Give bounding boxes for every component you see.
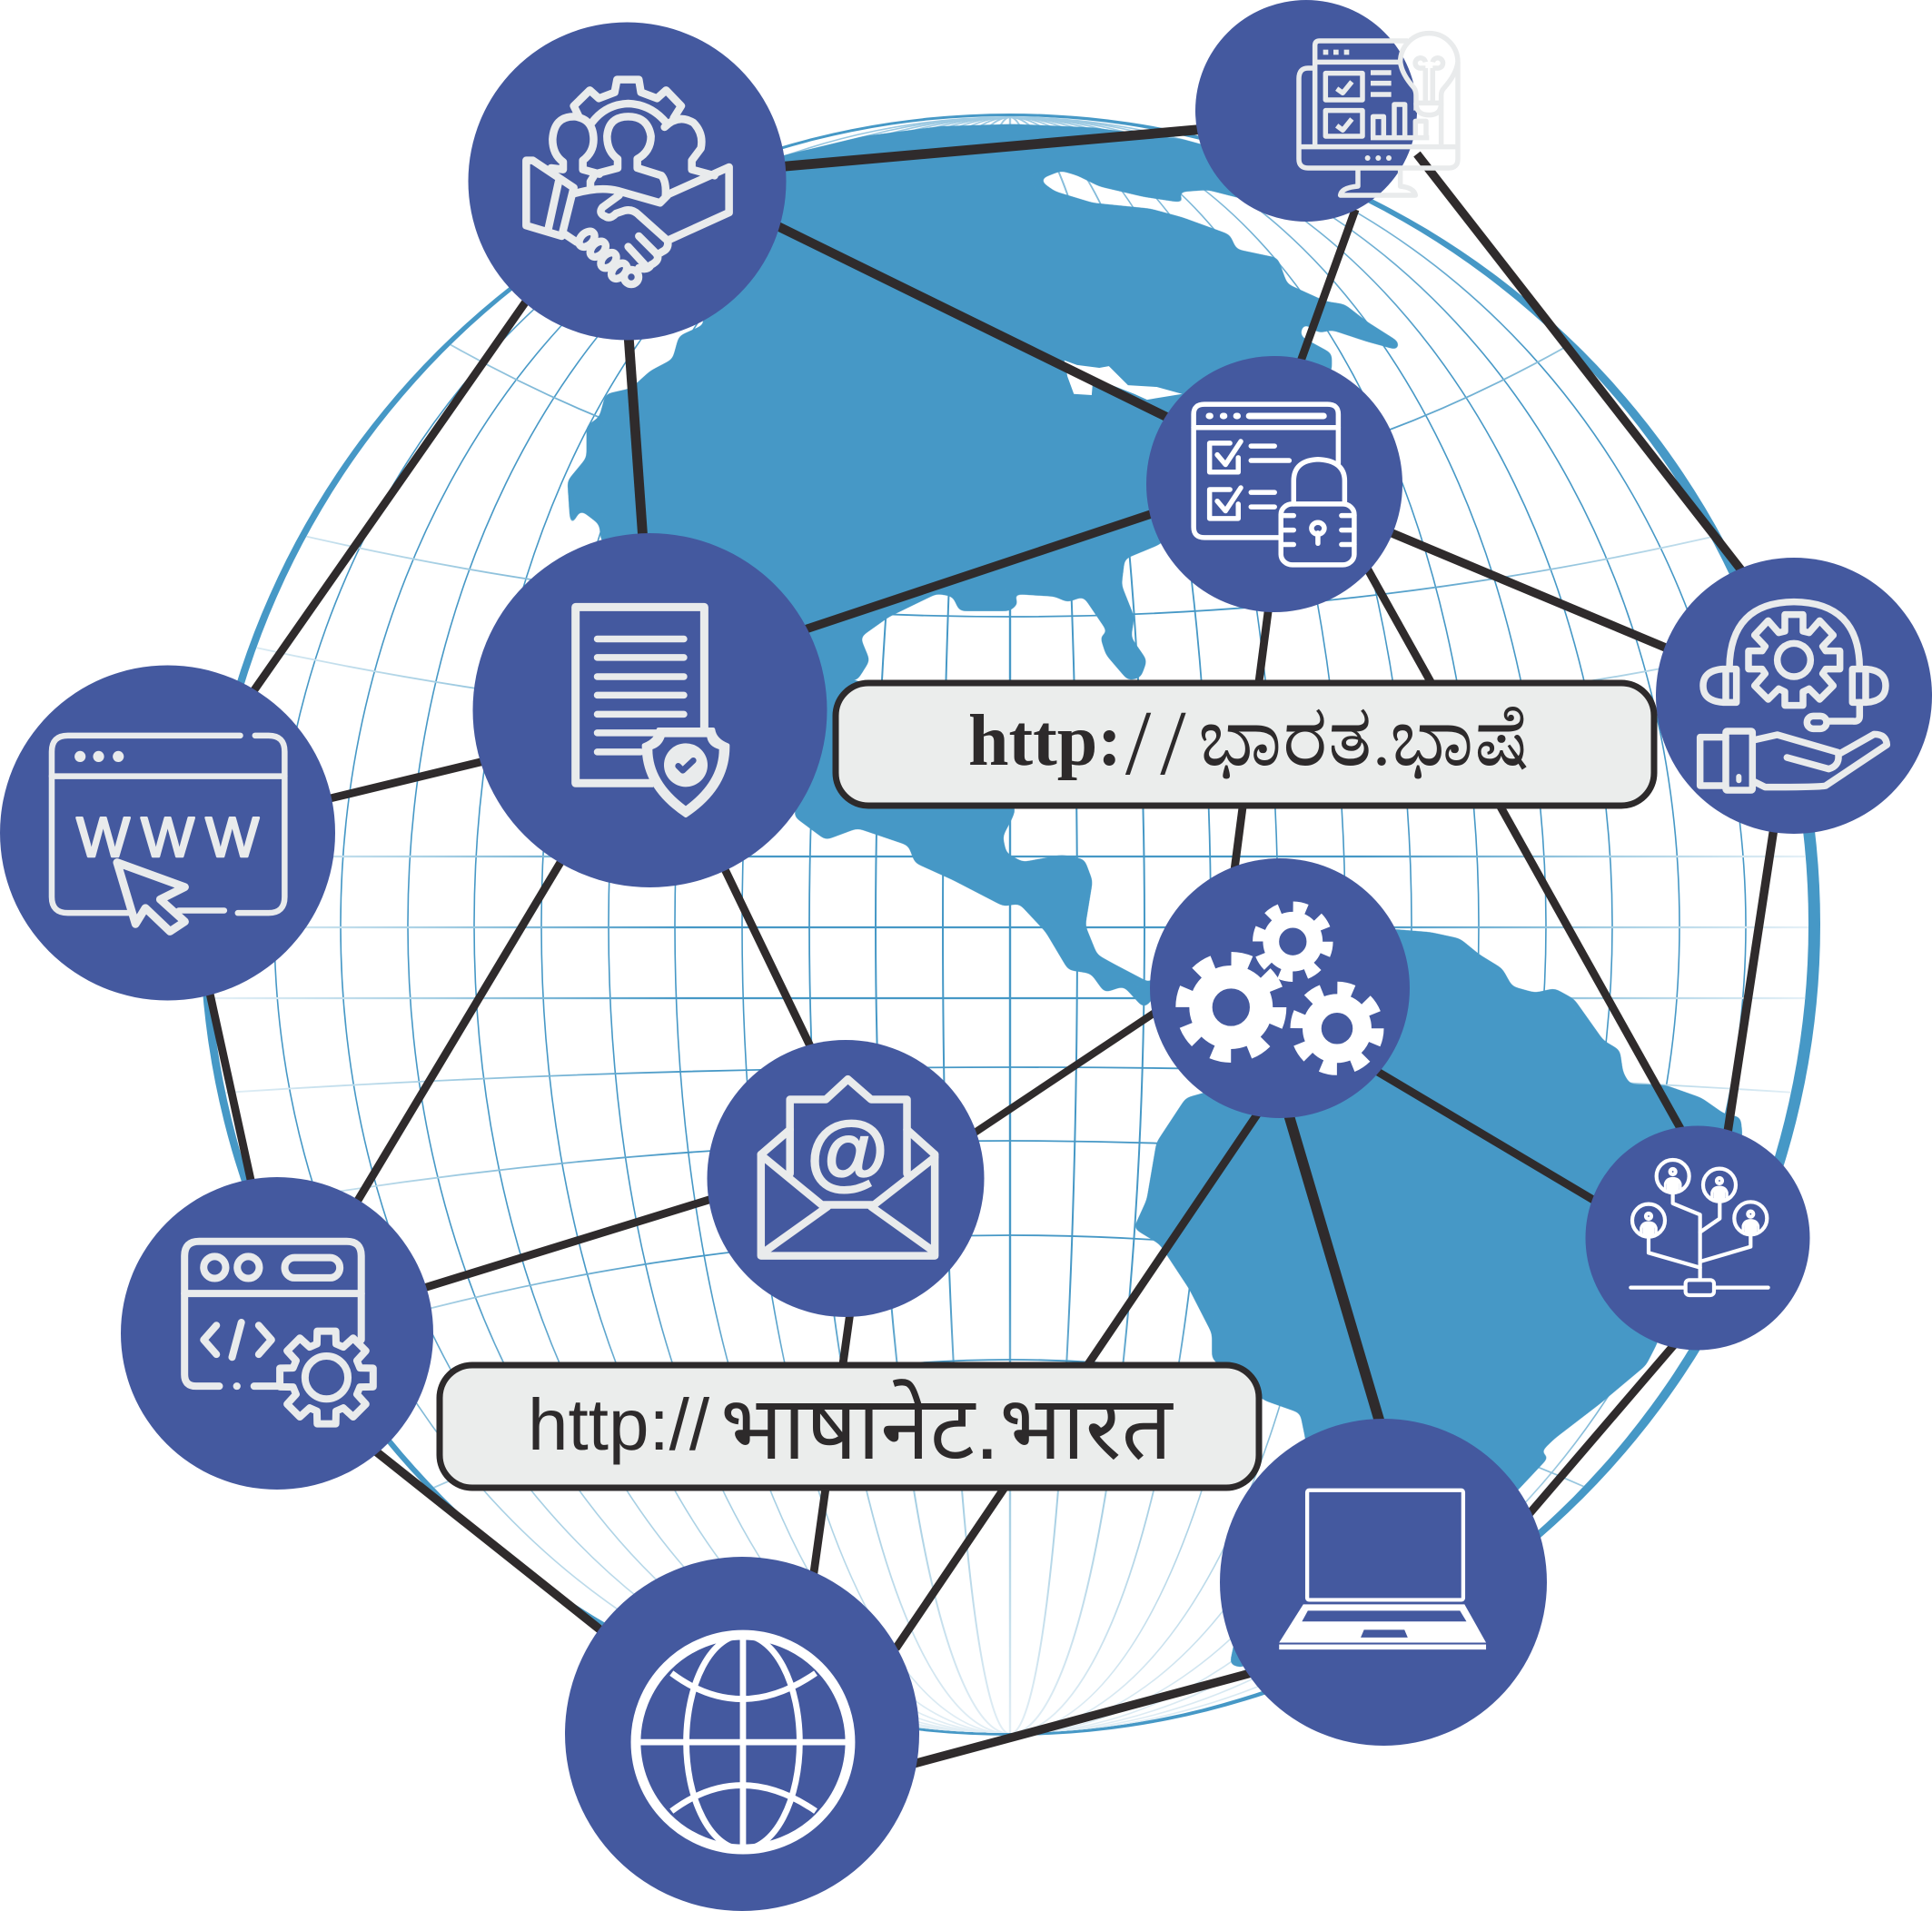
icon: monitor dashboard with bulb xyxy=(1299,34,1458,195)
world globe background xyxy=(200,114,1820,1736)
icon: checklist with padlock xyxy=(1194,404,1354,565)
icon: three gears xyxy=(1184,907,1377,1068)
icon: laptop computer xyxy=(1279,1490,1486,1649)
land: north continent xyxy=(568,124,1399,680)
node: code settings xyxy=(121,1177,433,1490)
node: support headset xyxy=(1656,558,1932,834)
label: Hindi domain xyxy=(440,1365,1259,1488)
node: policy document xyxy=(472,533,827,887)
land: central isthmus xyxy=(794,677,1181,1008)
text: Devanagari URL: भाषानेट.भारत xyxy=(720,1378,1174,1478)
icon: document with shield xyxy=(576,607,728,816)
node: people handshake xyxy=(469,22,787,340)
node: dashboard monitor xyxy=(1195,0,1458,222)
label: Kannada domain xyxy=(836,683,1654,806)
node: world wide web xyxy=(0,665,335,1001)
icon: open envelope with at sign: @ xyxy=(807,1105,888,1198)
node: settings gears xyxy=(1150,858,1410,1118)
icon: headset gear and hand xyxy=(1700,602,1887,790)
node: laptop xyxy=(1220,1419,1547,1746)
node: secure checklist xyxy=(1146,356,1402,612)
text: Devanagari URL: http:// xyxy=(528,1384,709,1465)
land: south continent xyxy=(1134,929,1742,1668)
icon: user tree network xyxy=(1630,1160,1769,1295)
node: people network xyxy=(1586,1126,1809,1350)
network connection lines xyxy=(210,129,1774,1765)
icon: browser window with cursor xyxy=(52,736,284,932)
icon: code window with gear xyxy=(184,1242,373,1424)
node: email xyxy=(707,1040,985,1317)
icon: handshake with team and gear xyxy=(526,80,729,284)
text: Kannada URL: ಭಾರತ.ಭಾಷೆ xyxy=(1199,701,1529,781)
icon: wireframe globe xyxy=(636,1635,850,1849)
land: inland lake xyxy=(1065,361,1183,400)
text: Kannada URL: http: xyxy=(968,701,1122,781)
icon: open envelope with at sign xyxy=(761,1079,935,1256)
icon: browser window with cursor: WWW xyxy=(76,807,270,869)
node: globe xyxy=(565,1557,919,1911)
text: Kannada URL: // xyxy=(1125,692,1195,795)
